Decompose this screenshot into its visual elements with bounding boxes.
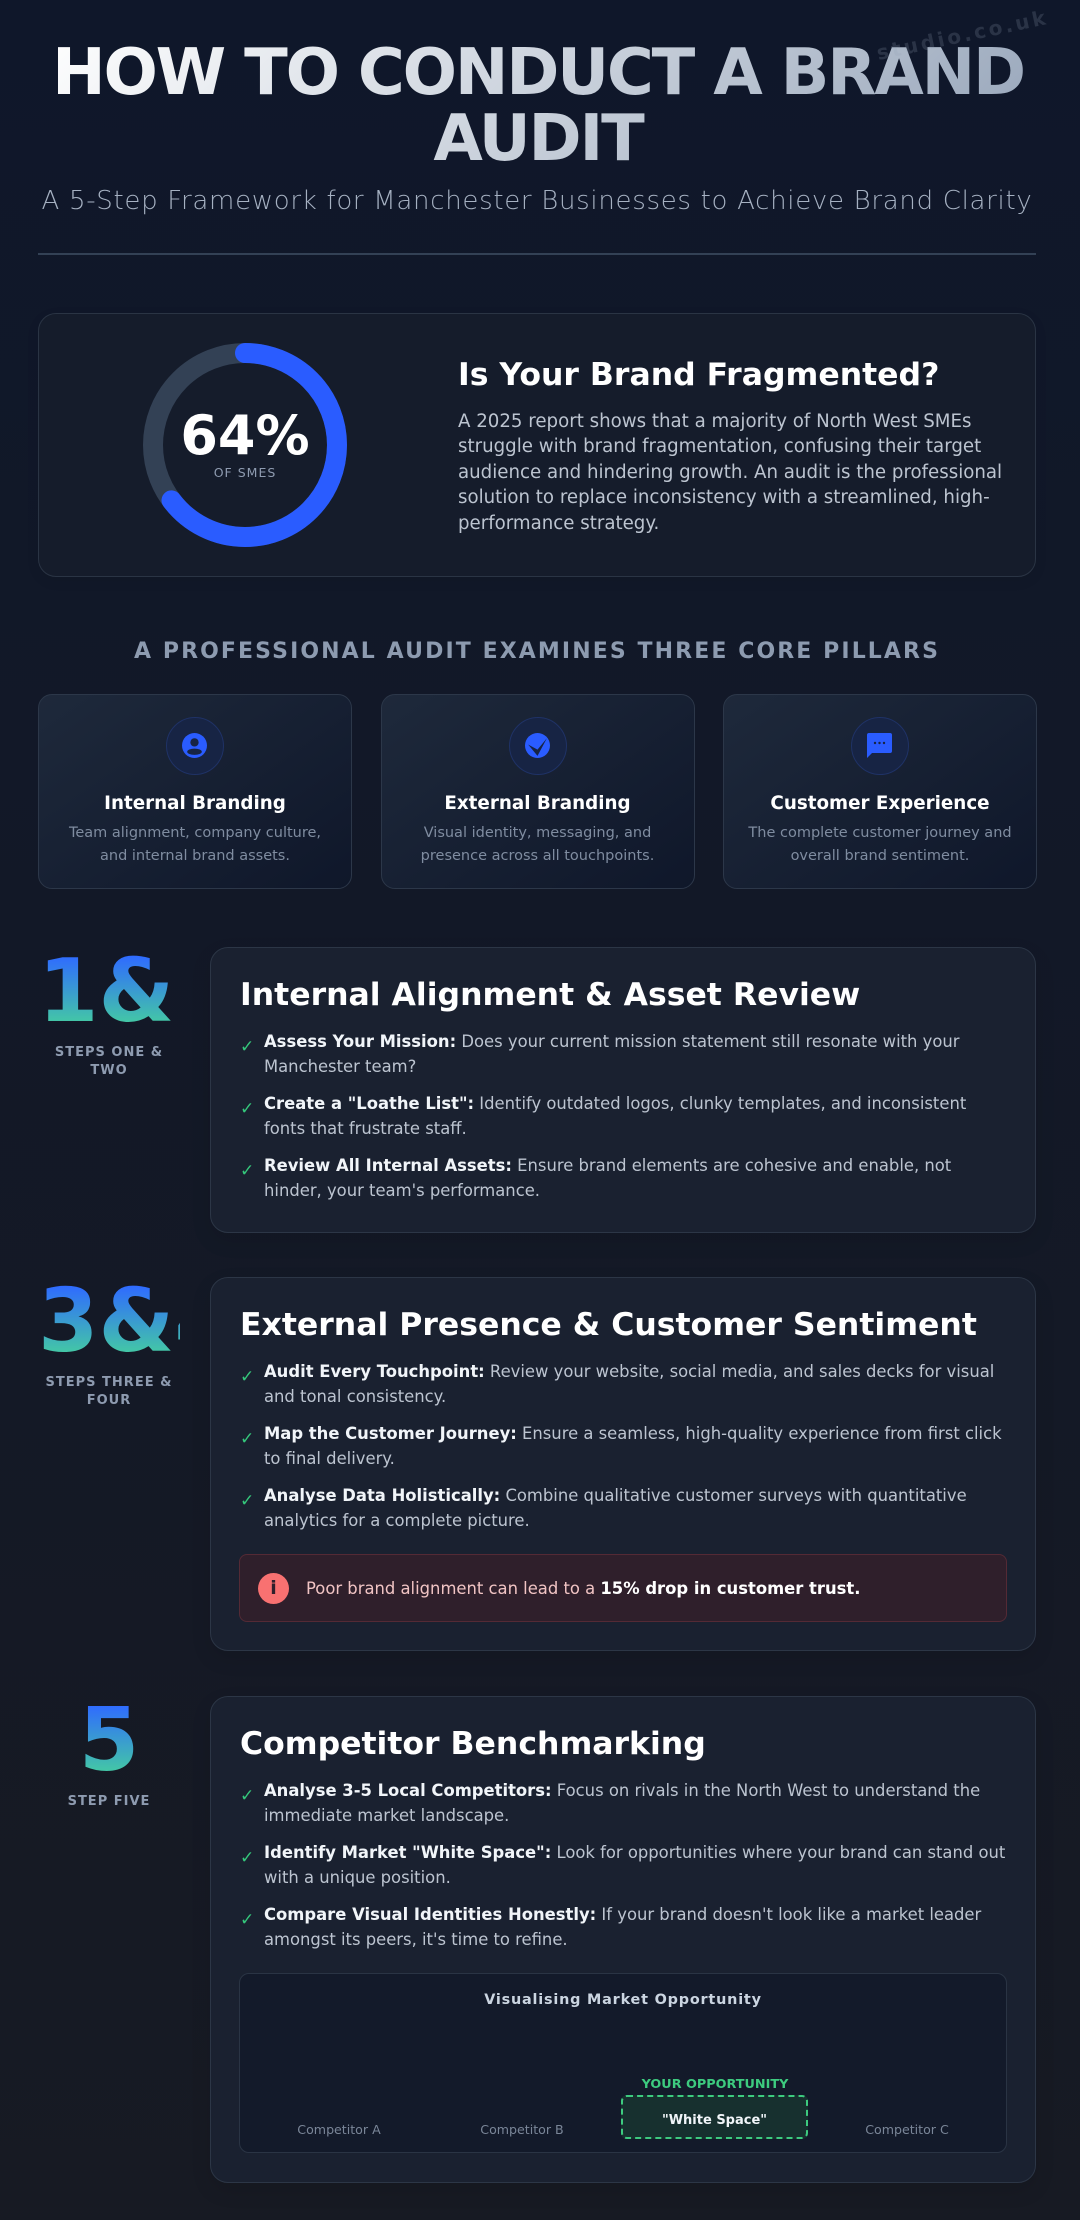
list item: [264, 1156, 951, 1200]
list item: Audit Every Touchpoint: Review your website, social media, and sales decks for visual: [264, 1362, 994, 1380]
check: ✓: [240, 1429, 254, 1449]
step label: FOUR: [87, 1393, 131, 1408]
list item: and tonal consistency.: [264, 1387, 446, 1406]
step number: 5: [38, 1690, 180, 1800]
chart box: white space: [621, 2095, 808, 2139]
heading: three core pillars: A PROFESSIONAL AUDIT EXAMINES THREE CORE PILLARS: [134, 638, 940, 664]
text block: A 2025 report shows that a majority of North West SMEs: [458, 410, 971, 432]
list item: Assess Your Mission: Does your current mission statement still resonate with your: [264, 1032, 960, 1050]
chart label: your opportunity: YOUR OPPORTUNITY: [642, 2077, 788, 2092]
list item: [264, 1362, 994, 1406]
chart box: white space: "White Space": [662, 2113, 767, 2128]
subtitle: A 5-Step Framework for Manchester Businesses to Achieve Brand Clarity: [42, 186, 1032, 216]
list item: analytics for a complete picture.: [264, 1511, 530, 1530]
pillar description: [421, 825, 654, 864]
check: ✓: [240, 1848, 254, 1868]
check: ✓: [240, 1161, 254, 1181]
text block: audience and hindering growth. An audit is the professional: [458, 462, 1002, 482]
panel: step five: [210, 1696, 1036, 2183]
chart label: competitor C: Competitor C: [865, 2122, 949, 2137]
step heading: External Presence & Customer Sentiment: [240, 1307, 977, 1343]
icon: check badge: [508, 717, 566, 775]
step number: 5: 5: [79, 1690, 139, 1791]
callout text: Poor brand alignment can lead to a 15% drop in customer trust.: [306, 1578, 860, 1598]
list item: [264, 1094, 966, 1138]
list item: fonts that frustrate staff.: [264, 1119, 467, 1138]
pillar title: External Branding: [444, 793, 631, 814]
list item: Identify Market "White Space": Look for opportunities where your brand can stand out: [264, 1842, 1005, 1862]
list item: Analyse 3-5 Local Competitors: Focus on rivals in the North West to understand the: [264, 1780, 980, 1800]
callout: customer trust: [239, 1554, 1007, 1622]
list item: [264, 1486, 967, 1530]
text block: struggle with brand fragmentation, confusing their target: [458, 436, 981, 457]
step label: STEPS THREE &: [46, 1375, 172, 1390]
list item: to final delivery.: [264, 1449, 395, 1468]
list item: Review All Internal Assets: Ensure brand elements are cohesive and enable, not: [264, 1156, 951, 1174]
pillar description: [748, 825, 1012, 864]
list item: amongst its peers, it's time to refine.: [264, 1930, 568, 1949]
step label: STEP FIVE: [68, 1794, 150, 1808]
list item: Manchester team?: [264, 1057, 416, 1076]
list item: hinder, your team's performance.: [264, 1181, 540, 1200]
donut chart: 64% of SMEs: [143, 343, 347, 547]
panel: step three and four: [210, 1277, 1036, 1651]
pillar description: Team alignment, company culture,: [69, 825, 321, 841]
step label: [55, 1045, 163, 1078]
check: ✓: [240, 1367, 254, 1387]
pillar title: Customer Experience: [770, 793, 990, 814]
list item: [264, 1424, 1002, 1468]
step heading: Internal Alignment & Asset Review: [240, 977, 860, 1013]
icon: info: i: [270, 1577, 277, 1599]
chart: market opportunity: [239, 1973, 1007, 2153]
check: ✓: [240, 1910, 254, 1930]
text block: performance strategy.: [458, 512, 659, 534]
pillar title: Internal Branding: [104, 793, 286, 814]
icon: info: [258, 1573, 289, 1604]
chart title: Visualising Market Opportunity: [484, 1992, 762, 2008]
check: ✓: [240, 1491, 254, 1511]
list item: [264, 1904, 982, 1949]
watermark: studio.co.uk: [874, 5, 1051, 65]
chart label: competitor A: Competitor A: [297, 2122, 381, 2137]
chart label: competitor B: Competitor B: [480, 2122, 564, 2137]
panel: internal branding: [38, 694, 352, 889]
step label: STEPS ONE &: [55, 1045, 163, 1060]
list item: Compare Visual Identities Honestly: If your brand doesn't look like a market leader: [264, 1904, 981, 1924]
text block: [458, 410, 1002, 534]
panel: external branding: [380, 694, 694, 889]
pillar description: [68, 825, 321, 864]
pillar description: Visual identity, messaging, and: [424, 825, 651, 841]
panel: step one and two: [210, 947, 1036, 1233]
list item: [264, 1780, 980, 1825]
list item: [264, 1842, 1005, 1887]
text block: solution to replace inconsistency with a streamlined, high-: [458, 487, 990, 508]
step label: TWO: [90, 1063, 128, 1078]
donut chart: 64% of SMEs: 64%: [180, 404, 310, 467]
pillar description: and internal brand assets.: [100, 848, 290, 864]
pillar description: overall brand sentiment.: [791, 848, 969, 864]
check: ✓: [240, 1099, 254, 1119]
check: ✓: [240, 1786, 254, 1806]
icon: person: [166, 717, 224, 775]
donut chart: 64% of SMEs: OF SMES: [214, 465, 276, 480]
icon: chat bubble: [851, 717, 909, 775]
step label: [46, 1375, 172, 1408]
pillar description: presence across all touchpoints.: [421, 848, 654, 864]
list item: immediate market landscape.: [264, 1806, 509, 1825]
list item: with a unique position.: [264, 1868, 451, 1887]
check: ✓: [240, 1037, 254, 1057]
pillar description: The complete customer journey and: [748, 825, 1012, 841]
panel: customer experience: [723, 694, 1037, 889]
panel: fragmented brand stat: [38, 313, 1036, 577]
list item: Map the Customer Journey: Ensure a seamless, high-quality experience from first click: [264, 1424, 1002, 1442]
list item: [264, 1032, 960, 1076]
list item: Analyse Data Holistically: Combine qualitative customer surveys with quantitative: [264, 1486, 967, 1504]
title: HOW TO CONDUCT A BRAND AUDIT: [52, 36, 1024, 176]
heading: Is Your Brand Fragmented?: [458, 356, 939, 392]
list item: Create a "Loathe List": Identify outdated logos, clunky templates, and inconsistent: [264, 1094, 966, 1112]
step heading: Competitor Benchmarking: [240, 1726, 706, 1762]
